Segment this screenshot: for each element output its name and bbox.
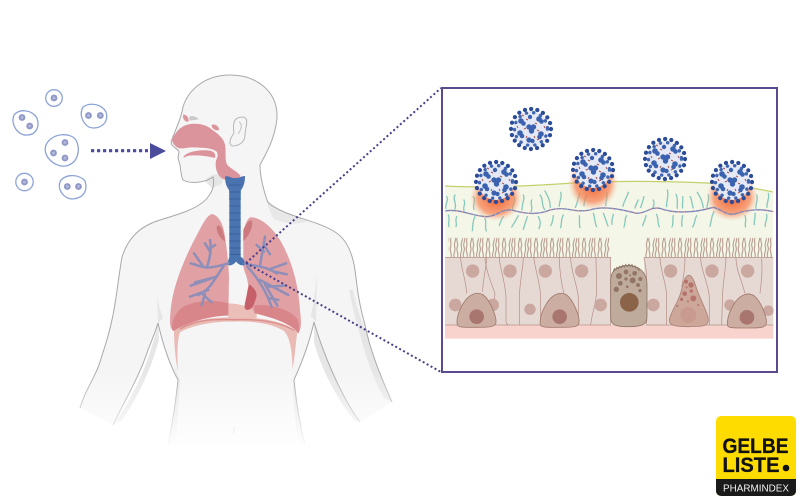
teal mucin strands [446, 190, 769, 231]
virus particles [476, 109, 752, 202]
basal cell [457, 293, 496, 327]
lung: right [243, 217, 301, 333]
lung: left [170, 214, 229, 331]
diaphragm [174, 318, 297, 372]
larynx [225, 176, 245, 200]
virus: attached [712, 162, 752, 202]
cell base [445, 257, 773, 326]
droplet [59, 176, 86, 199]
inhaled droplets [13, 90, 107, 199]
cell membrane [445, 207, 773, 217]
lungs [170, 178, 301, 372]
virus: attached [573, 150, 613, 190]
logo: Gelbe Liste Pharmindex: LISTE [722, 454, 780, 477]
cell nuclei [449, 264, 774, 316]
arrow: inhalation [91, 143, 166, 159]
logo: Gelbe Liste Pharmindex: GELBE [722, 435, 788, 458]
cilia [449, 237, 773, 257]
droplet [46, 90, 62, 106]
droplet [16, 173, 33, 191]
goblet cell [611, 264, 647, 327]
panel: airway epithelium detail [442, 88, 777, 372]
brush cell [669, 275, 708, 327]
virus: attached [476, 162, 516, 202]
logo: Gelbe Liste Pharmindex [716, 416, 796, 496]
bronchi [190, 237, 288, 307]
virus: free [645, 139, 685, 179]
epithelium [445, 237, 774, 339]
droplet [13, 111, 38, 135]
logo: Gelbe Liste Pharmindex: PHARMINDEX [723, 482, 789, 494]
nasal and oral airway [172, 114, 245, 200]
body silhouette [80, 75, 392, 445]
droplet [45, 135, 78, 166]
zoom leader lines [246, 88, 441, 372]
icon: ear [230, 117, 247, 146]
mediastinum [228, 303, 257, 318]
ciliated cell walls [445, 257, 773, 325]
infection glow [470, 156, 758, 221]
basement layer [445, 325, 773, 339]
heart [245, 284, 257, 310]
basal cell [540, 293, 579, 327]
trachea [228, 178, 245, 265]
mucus layer [445, 182, 773, 325]
basal cell [727, 294, 766, 328]
droplet [81, 104, 107, 128]
virus: free [511, 109, 551, 149]
